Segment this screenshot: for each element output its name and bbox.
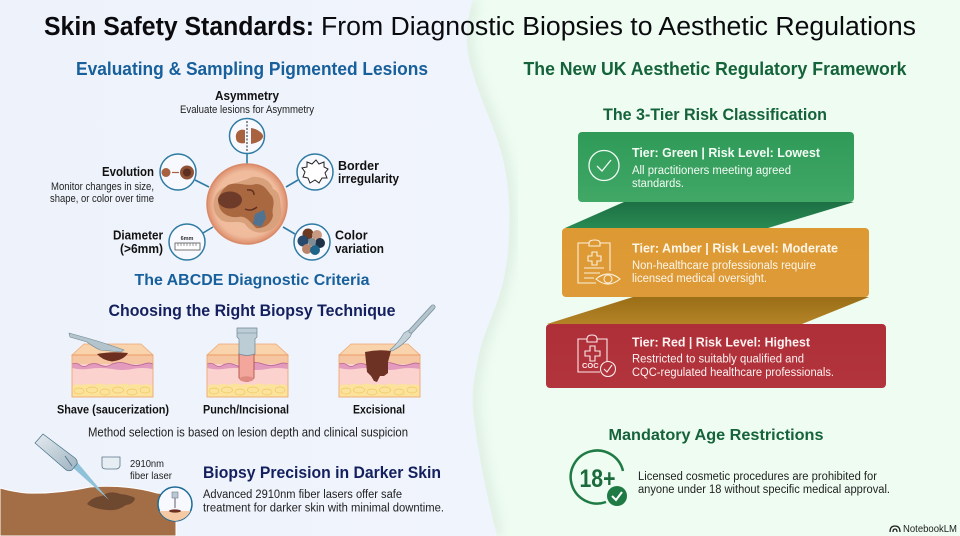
icon: laser head — [102, 457, 120, 469]
label: border: Border — [338, 159, 379, 173]
label: laser — [130, 458, 172, 482]
tier green text: Tier: Green | Risk Level: Lowest — [632, 145, 821, 160]
label: evolution — [50, 165, 154, 205]
label: diameter: (>6mm) — [120, 242, 163, 256]
connector: amber to red — [547, 297, 869, 324]
label: diameter — [113, 228, 163, 256]
label: Excisional — [353, 402, 405, 416]
label: laser: 2910nm — [130, 458, 164, 470]
biopsy: shave — [57, 333, 169, 416]
label: evolution: Evolution — [102, 165, 154, 179]
label: color variation — [335, 228, 384, 256]
laser illustration — [0, 434, 192, 536]
tier green text — [632, 145, 821, 190]
heading: 3-tier: The 3-Tier Risk Classification — [603, 106, 827, 124]
icon: check circle — [589, 150, 619, 180]
darker skin text — [203, 489, 444, 514]
tier green text: standards. — [632, 178, 684, 190]
connector lines — [195, 154, 298, 234]
age restriction text: anyone under 18 without specific medical approval. — [638, 484, 890, 496]
tier: green — [578, 132, 854, 202]
label: evolution: shape, or color over time — [50, 193, 154, 205]
icon: clipboard CQC — [578, 335, 616, 376]
biopsy: excisional — [339, 307, 433, 416]
heading: ABCDE criteria: The ABCDE Diagnostic Criteria — [134, 272, 370, 289]
label: evolution: Monitor changes in size, — [51, 181, 154, 193]
label: asymmetry: Asymmetry — [215, 89, 279, 103]
label: border: irregularity — [338, 172, 399, 186]
label: asymmetry — [180, 89, 314, 116]
laser beam — [71, 462, 109, 500]
heading: evaluating lesions: Evaluating & Sampling Pigmented Lesions — [76, 59, 428, 79]
icon: clipboard with eye — [578, 240, 620, 284]
icon: diameter: 6mm — [181, 236, 194, 242]
darker skin text: treatment for darker skin with minimal downtime. — [203, 502, 444, 514]
tier red text: Restricted to suitably qualified and — [632, 354, 804, 366]
label: laser: fiber laser — [130, 470, 172, 482]
darker skin text: Advanced 2910nm fiber lasers offer safe — [203, 489, 402, 501]
label: asymmetry: Evaluate lesions for Asymmetry — [180, 104, 314, 116]
title: Skin Safety Standards: — [44, 13, 314, 41]
tier: amber — [562, 228, 869, 297]
skin ground — [0, 486, 176, 536]
method note: Method selection is based on lesion depth and clinical suspicion — [88, 426, 408, 440]
tier green text: All practitioners meeting agreed — [632, 165, 791, 177]
title — [44, 13, 916, 41]
lesion — [87, 492, 135, 510]
central lesion — [207, 164, 287, 244]
label: color variation: Color — [335, 228, 368, 242]
icon: 18+ badge: 18+ — [580, 465, 616, 493]
biopsy: punch — [203, 328, 289, 416]
label: Shave (saucerization) — [57, 402, 169, 416]
tier red text: CQC-regulated healthcare professionals. — [632, 367, 834, 379]
heading: age restrictions: Mandatory Age Restrictions — [608, 427, 824, 444]
title: From Diagnostic Biopsies to Aesthetic Regulations — [321, 13, 916, 41]
label: diameter: Diameter — [113, 228, 163, 242]
icon: evolution — [160, 154, 196, 190]
icon: color variation — [294, 224, 330, 260]
darker skin heading: Biopsy Precision in Darker Skin — [203, 464, 441, 482]
heading: UK framework: The New UK Aesthetic Regulatory Framework — [524, 59, 907, 79]
background: right panel — [467, 0, 960, 536]
icon: 18+ badge — [571, 451, 627, 506]
label: Punch/Incisional — [203, 402, 289, 416]
label: color variation: variation — [335, 242, 384, 256]
tier: red — [546, 324, 886, 388]
icon: asymmetry — [230, 118, 264, 154]
ABCDE diagram — [50, 89, 399, 260]
tier amber text: Tier: Amber | Risk Level: Moderate — [632, 240, 838, 256]
age restriction text: Licensed cosmetic procedures are prohibited for — [638, 471, 877, 483]
background: panel edge shadow — [467, 0, 509, 536]
tier red text: Tier: Red | Risk Level: Highest — [632, 334, 811, 350]
tier amber text — [632, 240, 838, 285]
age restriction text — [638, 471, 890, 496]
laser handpiece — [35, 434, 77, 471]
icon: border — [297, 154, 333, 190]
tier amber text: Non-healthcare professionals require — [632, 260, 816, 272]
label: border — [338, 159, 399, 186]
inset circle — [158, 487, 192, 521]
connector: green to amber — [565, 202, 854, 228]
tier red text — [632, 334, 834, 379]
icon: diameter — [169, 224, 205, 260]
tier: red: COC — [582, 361, 599, 370]
heading: biopsy technique: Choosing the Right Biopsy Technique — [108, 301, 396, 320]
tier amber text: licensed medical oversight. — [632, 273, 767, 285]
